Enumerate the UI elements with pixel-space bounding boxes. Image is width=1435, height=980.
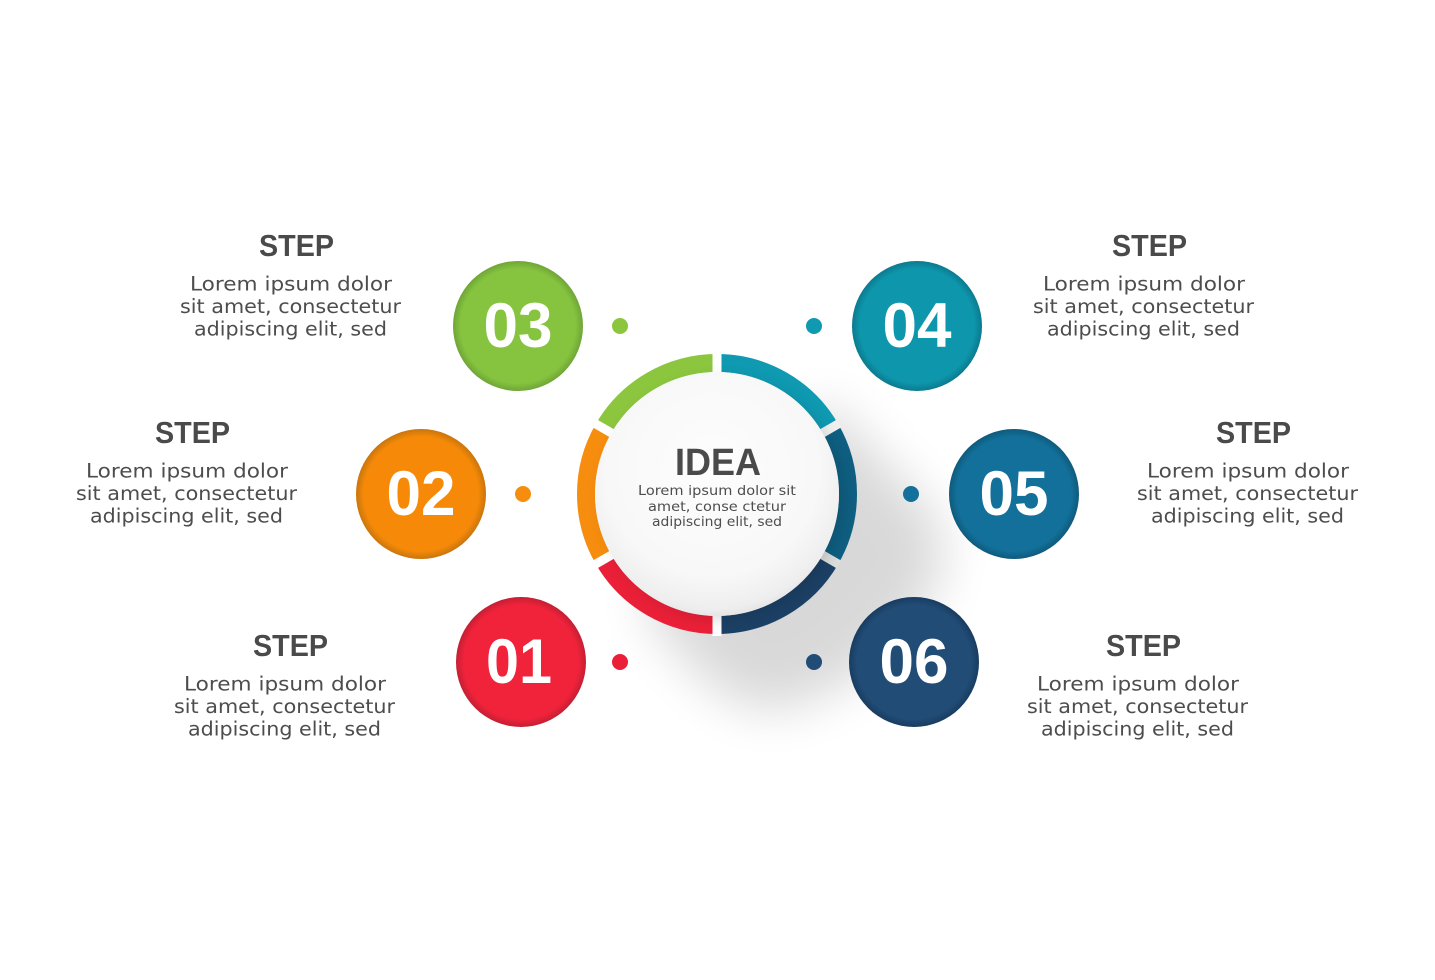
- step 02 text: sit amet, consectetur: [76, 482, 298, 505]
- ring segment 03 green: [604, 363, 717, 428]
- central text: idea: [638, 442, 796, 530]
- step 01 text: [174, 628, 396, 740]
- step 03 text: STEP: [259, 228, 334, 263]
- step 02 badge: 02: [386, 459, 456, 529]
- step 06 badge: [849, 597, 979, 727]
- ring segment 01 red: [604, 560, 717, 625]
- central text: idea: IDEA: [675, 442, 761, 484]
- ring segment 06 navy: [717, 560, 830, 625]
- step 02 connector dot: [515, 486, 531, 502]
- step 03 text: sit amet, consectetur: [180, 295, 402, 318]
- step 04 connector dot: [806, 318, 822, 334]
- step 06 text: [1027, 628, 1249, 740]
- step 04 text: [1033, 228, 1255, 340]
- ring segment 04 teal: [717, 363, 830, 428]
- step 06 text: sit amet, consectetur: [1027, 695, 1249, 718]
- step 04 text: adipiscing elit, sed: [1047, 318, 1240, 340]
- step 04 text: Lorem ipsum dolor: [1043, 272, 1246, 296]
- step 01 text: sit amet, consectetur: [174, 695, 396, 718]
- step 06 badge: 06: [880, 627, 948, 697]
- step 03 connector dot: [612, 318, 628, 334]
- step 02 text: adipiscing elit, sed: [90, 504, 283, 528]
- step 05 text: sit amet, consectetur: [1137, 482, 1359, 505]
- step 06 connector dot: [806, 654, 822, 670]
- central disc: [595, 372, 843, 619]
- step 01 badge: 01: [486, 627, 552, 697]
- step 03 text: adipiscing elit, sed: [194, 318, 387, 340]
- step 03 badge: [453, 261, 583, 391]
- step 06 text: STEP: [1106, 628, 1181, 663]
- central text: idea: adipiscing elit, sed: [652, 514, 782, 530]
- step 03 text: [180, 228, 402, 340]
- step 05 text: adipiscing elit, sed: [1151, 504, 1344, 528]
- step 01 badge: [456, 597, 586, 727]
- step 03 badge: 03: [484, 291, 552, 361]
- step 05 text: [1137, 415, 1359, 528]
- step 05 badge: 05: [980, 459, 1048, 529]
- step 03 text: Lorem ipsum dolor: [190, 272, 393, 296]
- step 02 text: [76, 415, 298, 528]
- central ring: [586, 363, 848, 625]
- step 06 text: Lorem ipsum dolor: [1037, 672, 1240, 696]
- central text: idea: Lorem ipsum dolor sit: [638, 483, 796, 499]
- step 05 text: STEP: [1216, 415, 1291, 450]
- ring segment 02 orange: [586, 428, 604, 560]
- ring segment 05 blue: [830, 428, 848, 560]
- step 05 badge: [949, 429, 1079, 559]
- central text: idea: amet, conse ctetur: [648, 499, 786, 515]
- step 04 text: sit amet, consectetur: [1033, 295, 1255, 318]
- step 06 text: adipiscing elit, sed: [1041, 718, 1234, 740]
- step 02 badge: [356, 429, 486, 559]
- step 02 text: Lorem ipsum dolor: [86, 460, 289, 482]
- central shadow: [640, 400, 943, 710]
- step 01 text: STEP: [253, 628, 328, 663]
- step 02 text: STEP: [155, 415, 230, 450]
- step 04 badge: 04: [882, 291, 952, 361]
- step 04 text: STEP: [1112, 228, 1187, 263]
- step 01 text: Lorem ipsum dolor: [184, 672, 387, 696]
- step 05 connector dot: [903, 486, 919, 502]
- step 01 text: adipiscing elit, sed: [188, 718, 381, 740]
- step 01 connector dot: [612, 654, 628, 670]
- step 05 text: Lorem ipsum dolor: [1147, 460, 1350, 482]
- step 04 badge: [852, 261, 982, 391]
